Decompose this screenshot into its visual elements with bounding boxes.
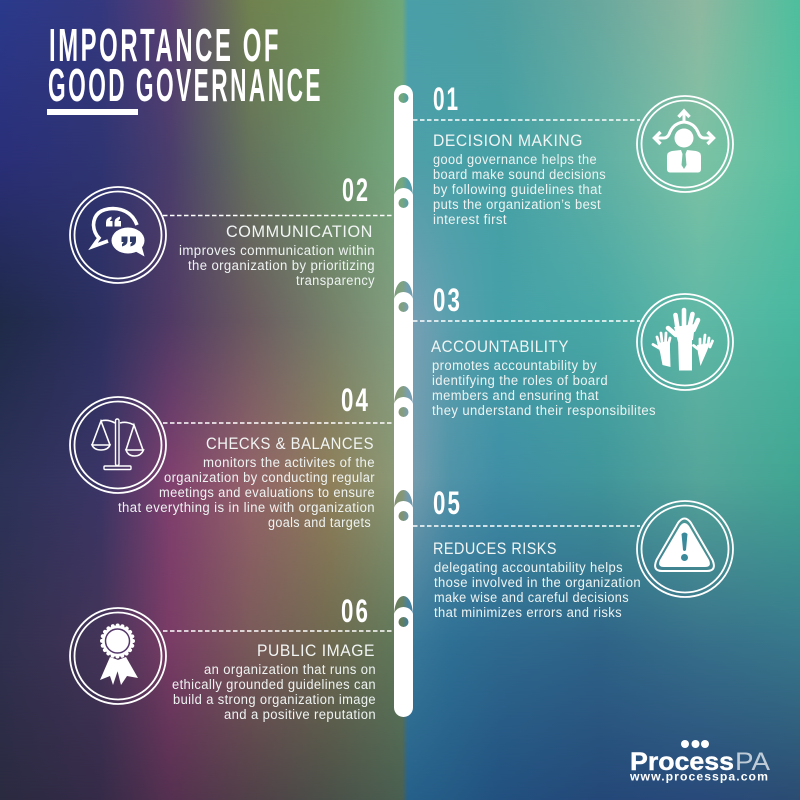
logo: ProcessPA: www.processpa.com [629, 772, 769, 784]
panel: 04 checks and balances [70, 382, 394, 530]
description: and a positive reputation [224, 707, 376, 722]
description: that minimizes errors and risks [434, 605, 622, 620]
icon: warning triangle [637, 501, 733, 597]
description: members and ensuring that [432, 388, 599, 403]
icon: decision maker with arrows [637, 96, 733, 192]
icon: balance scales [70, 397, 166, 493]
number 03: 03 [433, 282, 462, 318]
description [118, 455, 375, 530]
title [47, 19, 323, 115]
description: good governance helps the [433, 152, 597, 167]
description: build a strong organization image [173, 692, 376, 707]
logo: ProcessPA: PA [735, 748, 770, 776]
description: board make sound decisions [433, 167, 606, 182]
heading: ACCOUNTABILITY [431, 337, 569, 356]
description: identifying the roles of board [432, 373, 608, 388]
description: delegating accountability helps [434, 560, 623, 575]
description: monitors the activites of the [203, 455, 375, 470]
description: by following guidelines that [433, 182, 602, 197]
panel: 03 accountability [413, 282, 733, 418]
description [432, 358, 656, 418]
description: puts the organization’s best [433, 197, 601, 212]
title: IMPORTANCE OF [49, 19, 281, 71]
number 01: 01 [433, 81, 460, 117]
description: promotes accountability by [432, 358, 597, 373]
number 05: 05 [433, 485, 462, 521]
logo: ProcessPA [629, 740, 770, 784]
icon: raised hands [637, 294, 733, 390]
heading: REDUCES RISKS [433, 539, 557, 558]
description: ethically grounded guidelines can [172, 677, 376, 692]
number 02: 02 [342, 172, 370, 208]
number 06: 06 [341, 593, 370, 629]
description: interest first [433, 212, 507, 227]
description: an organization that runs on [204, 662, 376, 677]
description [179, 243, 375, 288]
heading: COMMUNICATION [226, 222, 373, 241]
logo: ProcessPA: Process [630, 748, 734, 776]
description: organization by conducting regular [164, 470, 375, 485]
description: transparency [296, 273, 375, 288]
panel: 02 communication [70, 172, 394, 288]
heading: DECISION MAKING [433, 131, 583, 150]
number 04: 04 [341, 382, 370, 418]
description [434, 560, 641, 620]
description: make wise and careful decisions [434, 590, 629, 605]
text: GOOD GOVERNANCE [48, 59, 323, 111]
description: goals and targets [268, 515, 371, 530]
panel: 05 reduces risks [413, 485, 733, 620]
description [172, 662, 376, 722]
icon: award ribbon [70, 608, 166, 704]
icon: speech bubbles [70, 187, 166, 283]
panel: 01 decision making [413, 81, 733, 227]
description: meetings and evaluations to ensure [159, 485, 375, 500]
description: they understand their responsibilites [432, 403, 656, 418]
description: those involved in the organization [434, 575, 641, 590]
description: that everything is in line with organization [118, 500, 375, 515]
heading: CHECKS & BALANCES [206, 434, 374, 453]
description: the organization by prioritizing [188, 258, 375, 273]
description [433, 152, 606, 227]
description: improves communication within [179, 243, 375, 258]
panel: 06 public image [70, 593, 394, 722]
heading: PUBLIC IMAGE [257, 641, 375, 660]
timeline bar [394, 85, 413, 717]
